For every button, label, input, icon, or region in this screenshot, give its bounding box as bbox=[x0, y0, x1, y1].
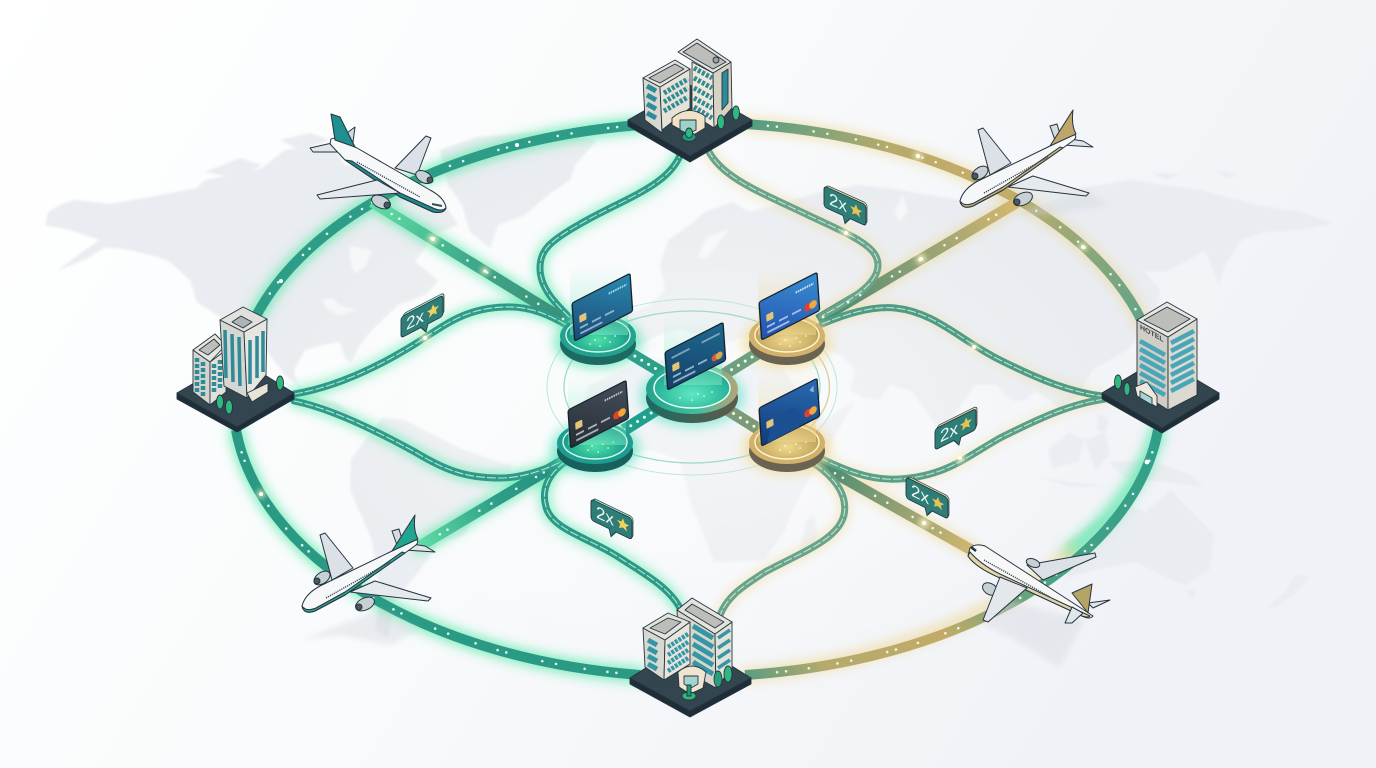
network glow bbox=[236, 124, 1158, 675]
card: bottom left charcoal bbox=[568, 380, 629, 448]
sparkling data dots bbox=[236, 124, 1158, 675]
map: water cut-outs bbox=[322, 195, 908, 357]
map: Arctic islands bbox=[205, 133, 1240, 180]
reward badge: left: 2x bbox=[406, 306, 424, 334]
spoke: bottom right plane bbox=[815, 462, 975, 552]
map: North America bbox=[45, 147, 458, 428]
map: Greenland bbox=[440, 132, 597, 248]
hub: bottom right bbox=[749, 422, 825, 472]
route: left hotel to bottom-left card bbox=[294, 401, 568, 478]
map: Madagascar bbox=[800, 515, 818, 558]
light columns behind cards bbox=[568, 265, 816, 445]
route: top hotel to top-right card bbox=[708, 150, 878, 316]
route: top hotel to top-left card bbox=[540, 150, 682, 318]
map: Indonesia and Philippines bbox=[1039, 414, 1205, 487]
reward badge: left bbox=[401, 293, 444, 345]
fountain and trees bbox=[682, 692, 696, 700]
hub: bottom left bbox=[557, 422, 633, 472]
entrance bbox=[1135, 382, 1157, 407]
curved hotel routes bbox=[294, 150, 1105, 615]
centre glow wash bbox=[260, 160, 1120, 680]
connector: centre to top-right hub bbox=[718, 352, 760, 378]
reward badge: upper right bbox=[824, 184, 867, 233]
plane: top left bbox=[310, 114, 446, 212]
route: bottom hotel to bottom-left card bbox=[544, 462, 682, 612]
low wing bbox=[193, 334, 226, 405]
hub: centre bbox=[646, 364, 738, 423]
hub glows bbox=[551, 316, 831, 474]
card: top right blue bbox=[759, 272, 820, 340]
platform bbox=[628, 85, 752, 162]
route: left hotel to top-left card bbox=[294, 307, 568, 394]
spoke: top right plane bbox=[818, 203, 1016, 320]
ring segment: top left bbox=[255, 125, 640, 318]
route: right hotel to bottom-right card bbox=[820, 399, 1105, 479]
map: South America bbox=[350, 418, 513, 638]
entrance bbox=[678, 666, 706, 694]
platform bbox=[630, 640, 751, 717]
map: Australia bbox=[1065, 490, 1214, 585]
map: New Zealand and Tasmania bbox=[1185, 575, 1311, 608]
entrance bbox=[672, 110, 705, 136]
hotel: bottom bbox=[630, 598, 751, 717]
reward badge: lower right bbox=[906, 475, 949, 526]
hotel: top bbox=[628, 39, 752, 162]
hotel: left bbox=[177, 307, 294, 432]
connector: centre to bottom-right hub bbox=[720, 405, 760, 430]
map: Africa bbox=[575, 355, 855, 562]
right wing bbox=[677, 598, 732, 688]
sign: HOTEL bbox=[1140, 322, 1164, 344]
reward badge: bottom: 2x bbox=[596, 502, 614, 530]
tower bbox=[220, 320, 247, 398]
reward badge: upper right: 2x bbox=[829, 189, 847, 216]
connector: centre to bottom-left hub bbox=[624, 405, 664, 430]
reward badge: right: 2x bbox=[940, 418, 958, 446]
hub: top right bbox=[749, 315, 825, 365]
map: Eurasia bbox=[620, 180, 1333, 432]
hotel: right bbox=[1102, 302, 1219, 433]
spoke: bottom left plane bbox=[420, 458, 568, 546]
entrance canopy bbox=[247, 383, 268, 402]
left wing bbox=[643, 613, 690, 680]
route: right hotel to top-right card bbox=[822, 308, 1102, 396]
plane shadows bbox=[300, 190, 1110, 668]
ring segment: top right bbox=[745, 124, 1146, 330]
spoke: top left plane bbox=[372, 202, 568, 322]
plane: top right bbox=[960, 110, 1093, 209]
hub connectors bbox=[624, 352, 760, 430]
spokes from planes to card hubs bbox=[372, 202, 1016, 552]
connector: centre to top-left hub bbox=[628, 352, 668, 376]
platform bbox=[1102, 358, 1219, 433]
route centre lines bbox=[294, 150, 1105, 615]
plane: bottom right bbox=[968, 545, 1110, 623]
trees bbox=[1114, 375, 1122, 389]
concentric hub rings bbox=[547, 299, 837, 475]
trees and fountain bbox=[682, 132, 696, 142]
trees bbox=[216, 395, 224, 409]
card: top left teal bbox=[572, 273, 633, 341]
reward badge: lower right: 2x bbox=[911, 480, 929, 508]
card: bottom right deep blue bbox=[759, 378, 820, 446]
route: bottom hotel to bottom-right card bbox=[720, 464, 845, 615]
platform bbox=[177, 358, 294, 432]
outer route ring bbox=[236, 124, 1158, 675]
world map background bbox=[45, 132, 1333, 638]
hub: top left bbox=[560, 315, 636, 365]
bright sparkles bbox=[257, 143, 1149, 528]
ring segment: bottom right bbox=[745, 430, 1158, 675]
ring segment: bottom left bbox=[236, 430, 640, 675]
reward badge: right bbox=[935, 406, 977, 457]
reward badge: bottom bbox=[591, 497, 633, 547]
card: centre navy bbox=[665, 322, 726, 390]
plane: bottom left bbox=[302, 515, 435, 614]
